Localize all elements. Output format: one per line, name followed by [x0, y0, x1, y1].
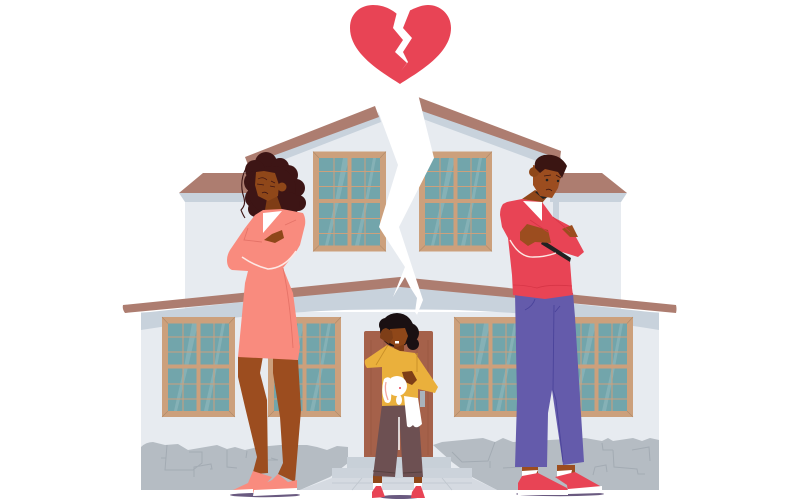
hand	[264, 230, 284, 243]
face and neck	[265, 196, 282, 210]
upper walls	[185, 112, 621, 310]
neck	[394, 343, 404, 351]
face	[390, 328, 408, 347]
ankles	[373, 476, 422, 484]
bunny	[382, 376, 422, 450]
soles	[233, 488, 297, 496]
dress	[227, 209, 305, 360]
arm outline	[510, 240, 556, 257]
hair	[379, 313, 419, 350]
child	[365, 313, 438, 499]
lower roof	[123, 277, 676, 313]
raised hand	[380, 328, 393, 344]
sweater	[500, 199, 584, 299]
neck	[522, 190, 548, 203]
upper roof right	[418, 97, 561, 159]
upper roof shadow	[248, 108, 561, 170]
left shoe	[233, 471, 272, 493]
hair	[241, 152, 306, 218]
stone base	[141, 438, 659, 490]
door	[364, 331, 433, 459]
right side roof	[550, 173, 627, 232]
upper roof left	[245, 106, 379, 165]
lower roof shadow	[141, 285, 659, 330]
sweater	[365, 345, 438, 406]
upper right window	[419, 152, 492, 252]
sweater hem	[513, 217, 572, 288]
broken heart	[350, 5, 451, 84]
legs	[238, 356, 268, 474]
lower windows	[162, 317, 633, 417]
crack through house	[374, 90, 434, 322]
hand holding bunny	[402, 371, 417, 385]
man	[500, 155, 604, 496]
sleeve stripe	[541, 240, 571, 262]
right shoe	[253, 474, 297, 493]
dress seams	[244, 220, 296, 348]
socks	[373, 483, 422, 489]
face details	[546, 179, 548, 181]
pants	[515, 293, 584, 467]
house	[123, 97, 676, 490]
shoes	[372, 486, 385, 498]
head	[533, 165, 562, 198]
shirt	[523, 201, 542, 221]
shoes	[518, 473, 567, 495]
arm outline	[242, 251, 296, 269]
hair	[535, 155, 567, 178]
door handle	[420, 391, 425, 407]
steps	[300, 457, 497, 490]
upper left window	[313, 152, 386, 252]
main wall	[141, 312, 659, 490]
arms	[520, 224, 551, 246]
left side roof	[179, 173, 250, 202]
shadow under shoes	[516, 492, 604, 496]
collar	[535, 190, 548, 199]
shadow	[380, 495, 420, 499]
woman	[227, 152, 306, 497]
pants	[373, 404, 423, 477]
shadow under shoes	[230, 493, 300, 497]
shirt	[263, 211, 282, 233]
heart crack	[393, 8, 412, 71]
socks and ankles	[522, 465, 575, 474]
